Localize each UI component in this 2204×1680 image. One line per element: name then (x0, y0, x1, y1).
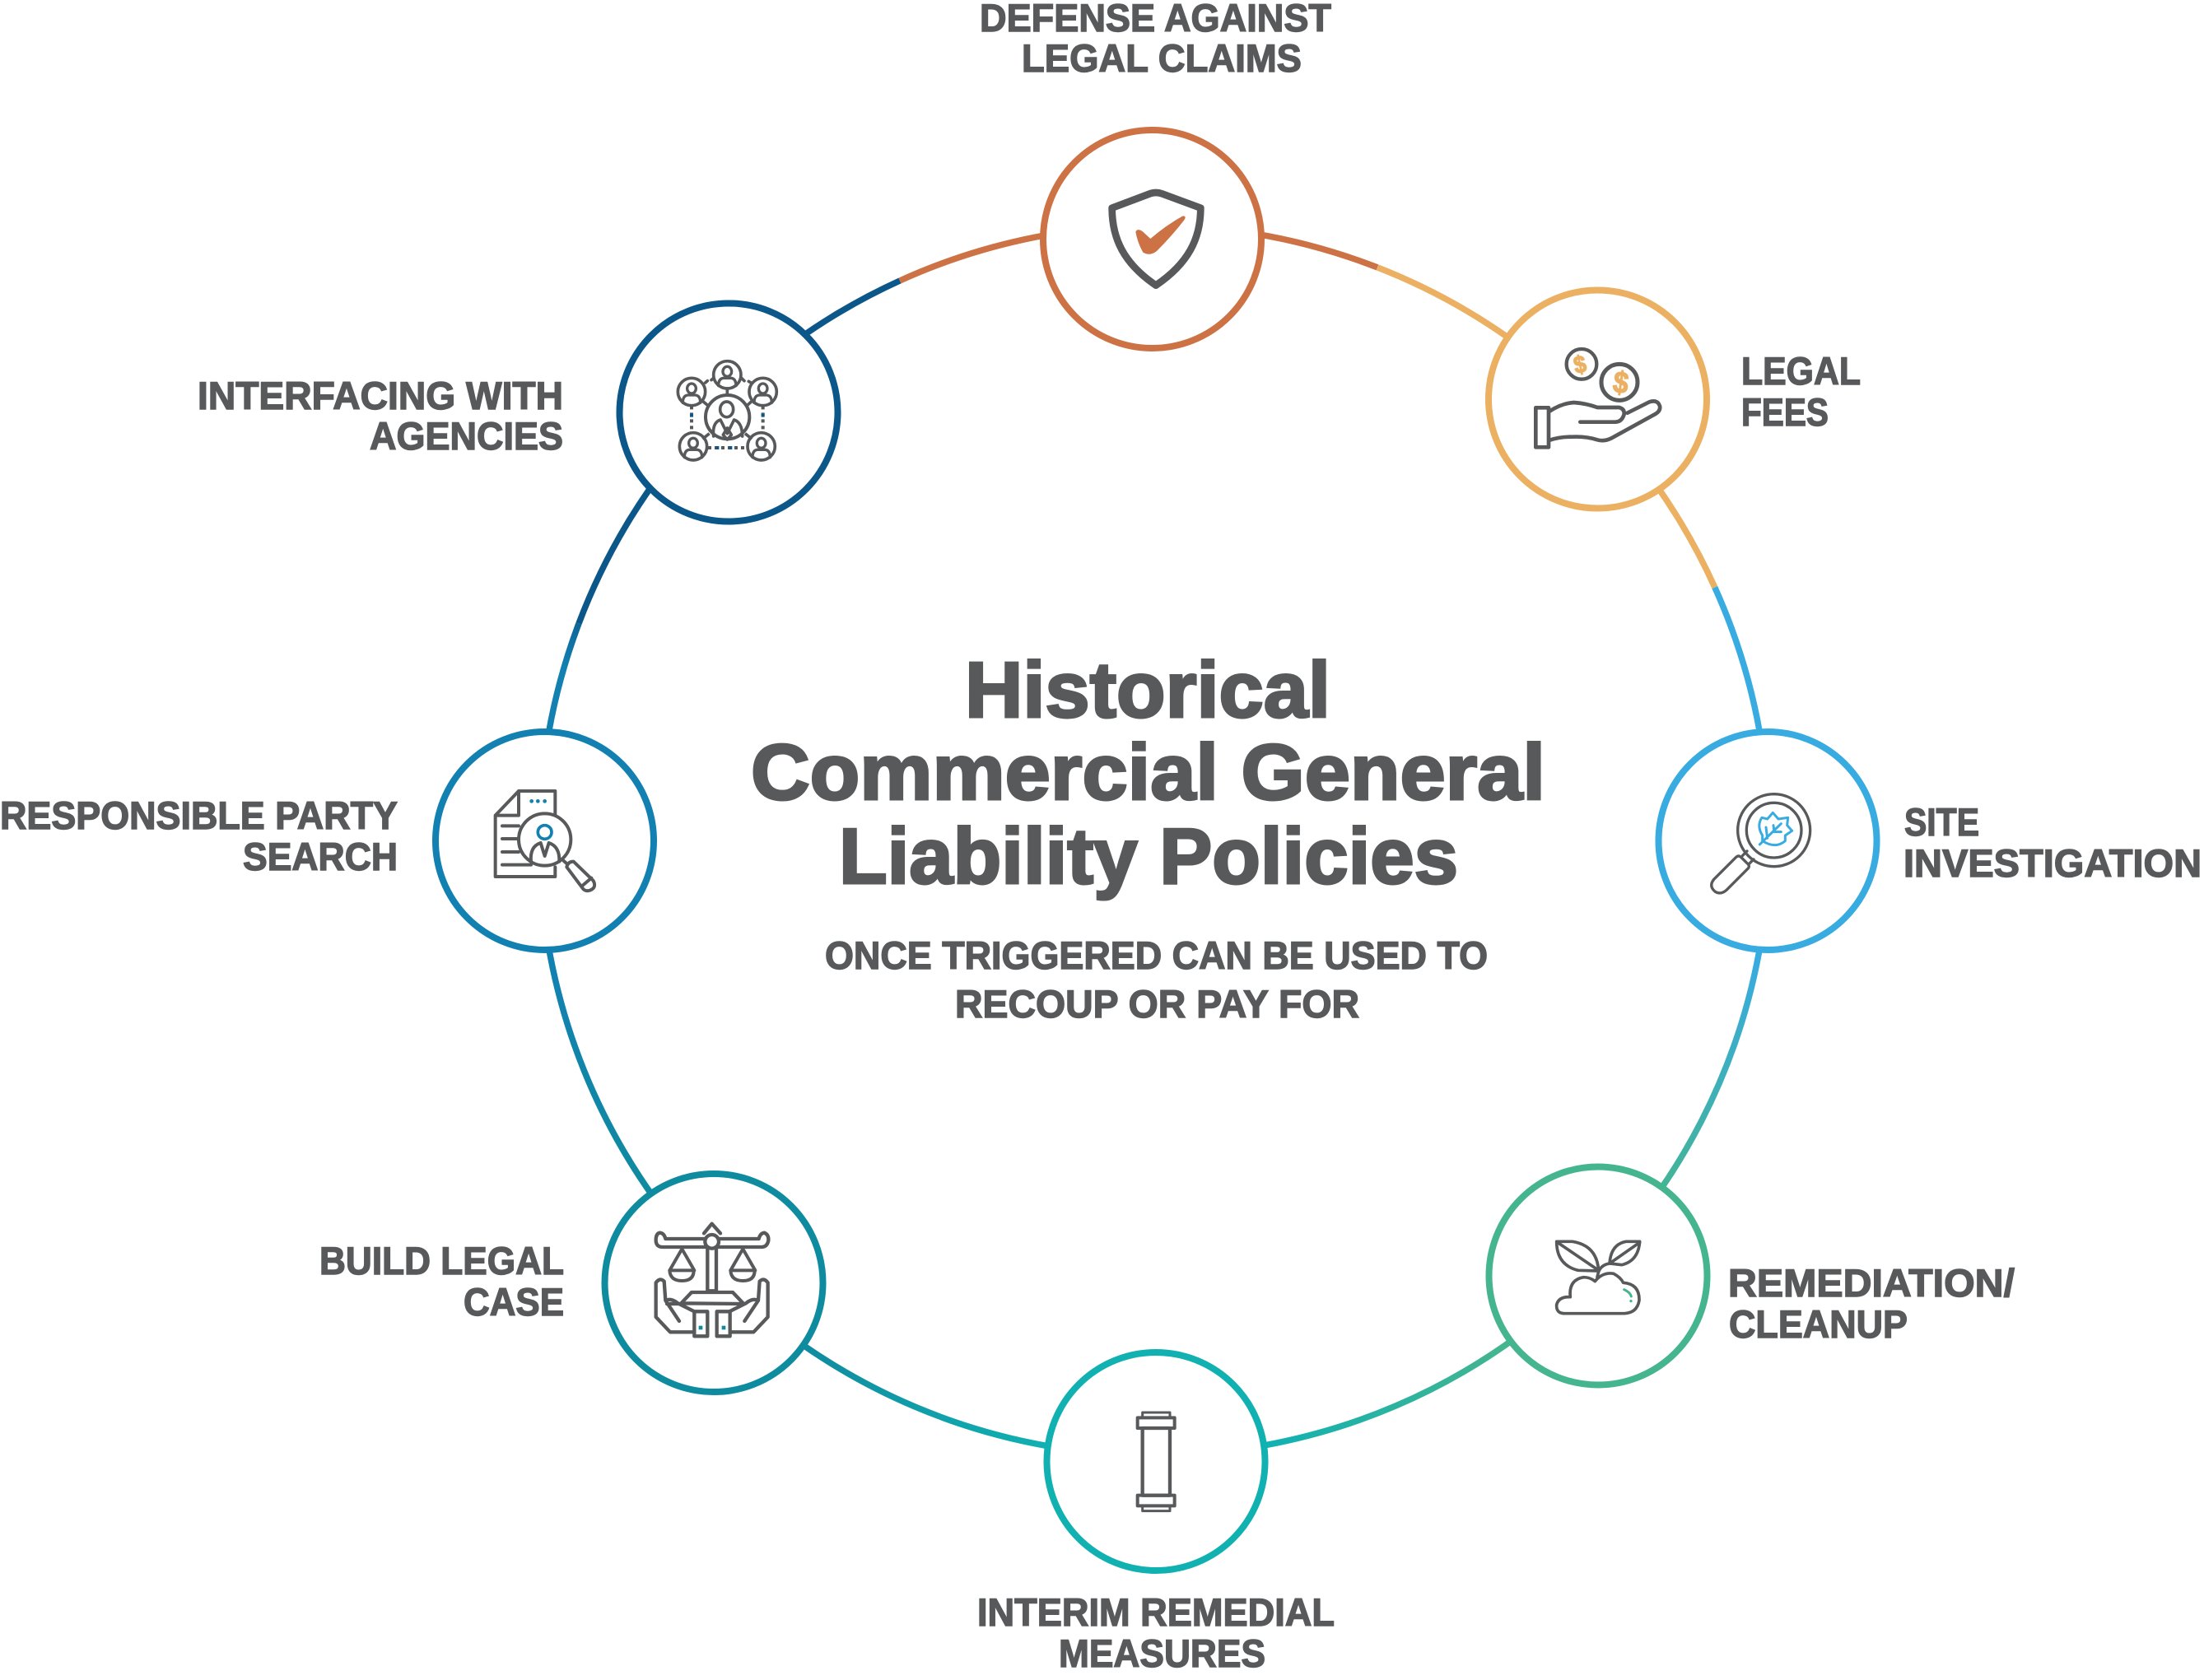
subtitle: ONCE TRIGGERED CAN BE USED TO (825, 933, 1488, 977)
icon: sprout and cloud (1557, 1241, 1640, 1314)
label (319, 1239, 564, 1324)
label: INTERIM REMEDIAL (977, 1590, 1335, 1634)
circle (1658, 732, 1877, 950)
title (751, 646, 1545, 900)
circle (1489, 1167, 1708, 1384)
item: site investigation (1658, 732, 2202, 950)
title: Historical (965, 646, 1330, 734)
label: CASE (464, 1280, 564, 1324)
title: Commercial General (751, 728, 1545, 817)
label: INVESTIGATION (1903, 841, 2202, 885)
ring connecting the circles (539, 226, 1769, 1455)
label (0, 793, 398, 878)
item: build legal case (319, 1174, 823, 1392)
icon: hand with coins: $ (1571, 350, 1589, 379)
subtitle: RECOUP OR PAY FOR (955, 982, 1359, 1026)
label: BUILD LEGAL (319, 1239, 564, 1282)
subtitle (825, 933, 1488, 1026)
label: MEASURES (1059, 1631, 1265, 1675)
title: Liability Policies (839, 812, 1458, 900)
label (1741, 349, 1861, 434)
label: INTERFACING WITH (198, 374, 563, 417)
label: CLEANUP (1729, 1302, 1908, 1346)
label: RESPONSIBLE PARTY (0, 793, 398, 837)
item: legal fees (1489, 290, 1861, 509)
icon: document and magnifier (496, 791, 594, 891)
label: LEGAL (1741, 349, 1861, 393)
item: remediation / cleanup (1489, 1167, 2015, 1384)
icon: scales in hands (656, 1224, 768, 1336)
icon: hand with coins (1535, 349, 1660, 447)
circle (604, 1174, 823, 1392)
item: defense against legal claims (980, 0, 1331, 348)
item: interim remedial measures (977, 1352, 1335, 1675)
circle (1489, 290, 1707, 509)
circle (619, 303, 838, 522)
label: SEARCH (243, 835, 398, 878)
label (977, 1590, 1335, 1675)
icon: shield with check (1112, 193, 1200, 286)
label: FEES (1741, 390, 1829, 434)
label (1903, 800, 2202, 885)
label: AGENCIES (370, 414, 563, 458)
icon: pipe (1138, 1412, 1175, 1511)
item: responsible party search (0, 732, 654, 950)
label: REMEDIATION/ (1728, 1261, 2015, 1305)
item: interfacing with agencies (198, 303, 838, 522)
label: LEGAL CLAIMS (1022, 36, 1302, 80)
circle (436, 732, 654, 950)
circle (1047, 1352, 1265, 1571)
icon: magnifier with leaf (1712, 794, 1810, 893)
label: SITE (1904, 800, 1979, 844)
icon: people network (678, 361, 776, 460)
circle (1043, 130, 1261, 348)
label (198, 374, 563, 458)
icon: hand with coins: $ (1611, 365, 1631, 401)
label (1728, 1261, 2015, 1346)
label (980, 0, 1331, 80)
